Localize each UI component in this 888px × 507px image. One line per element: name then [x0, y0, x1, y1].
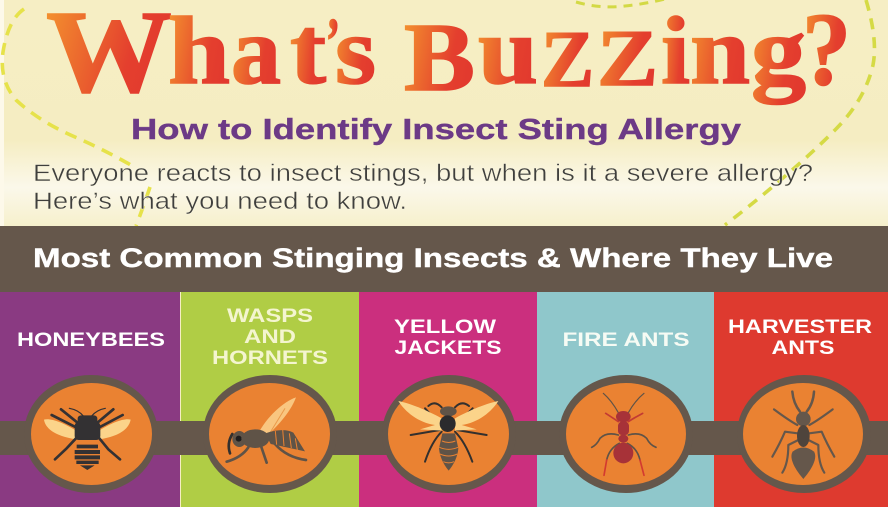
- title: Z: [597, 15, 658, 103]
- panel: honeybees: [0, 292, 180, 507]
- section banner: Most Common Stinging Insects & Where They Live: [33, 243, 833, 273]
- icon: fire ant: [559, 375, 693, 493]
- panel: honeybees: HONEYBEES: [17, 330, 165, 351]
- title: Z: [541, 16, 594, 104]
- panel: yellow jackets: [359, 292, 537, 507]
- connecting strip: [0, 421, 888, 455]
- panel: harvester ants: ANTS: [772, 338, 834, 359]
- title: B: [404, 4, 475, 112]
- icon: honeybee: [24, 375, 158, 493]
- section banner: [0, 226, 888, 292]
- intro text: [33, 160, 813, 215]
- panel: fire ants: FIRE ANTS: [562, 330, 690, 351]
- panel: wasps and hornets: WASPS: [227, 306, 313, 327]
- subtitle: How to Identify Insect Sting Allergy: [131, 114, 741, 146]
- intro text: Here’s what you need to know.: [33, 188, 407, 215]
- icon: harvester ant: [737, 375, 871, 493]
- header background: [0, 0, 888, 226]
- title: s: [335, 0, 376, 104]
- panel: harvester ants: [714, 292, 888, 507]
- title: h: [168, 0, 230, 104]
- title: ’: [326, 5, 340, 76]
- title: [46, 0, 851, 117]
- title: n: [690, 0, 750, 104]
- icon: wasp: [203, 375, 337, 493]
- panel: harvester ants: HARVESTER: [728, 317, 872, 338]
- icon: yellow jacket: [382, 375, 516, 493]
- panel: yellow jackets: JACKETS: [394, 338, 502, 359]
- title: u: [478, 0, 538, 104]
- panel: wasps and hornets: [181, 292, 359, 507]
- panel: fire ants: [537, 292, 714, 507]
- panel: yellow jackets: YELLOW: [394, 317, 496, 338]
- title: g: [751, 0, 806, 104]
- panel: wasps and hornets: AND: [244, 327, 296, 348]
- title: t: [290, 0, 326, 104]
- title: a: [231, 0, 281, 104]
- intro text: Everyone reacts to insect stings, but when is it a severe allergy?: [33, 160, 813, 187]
- title: i: [661, 0, 690, 104]
- panel: wasps and hornets: HORNETS: [212, 348, 328, 369]
